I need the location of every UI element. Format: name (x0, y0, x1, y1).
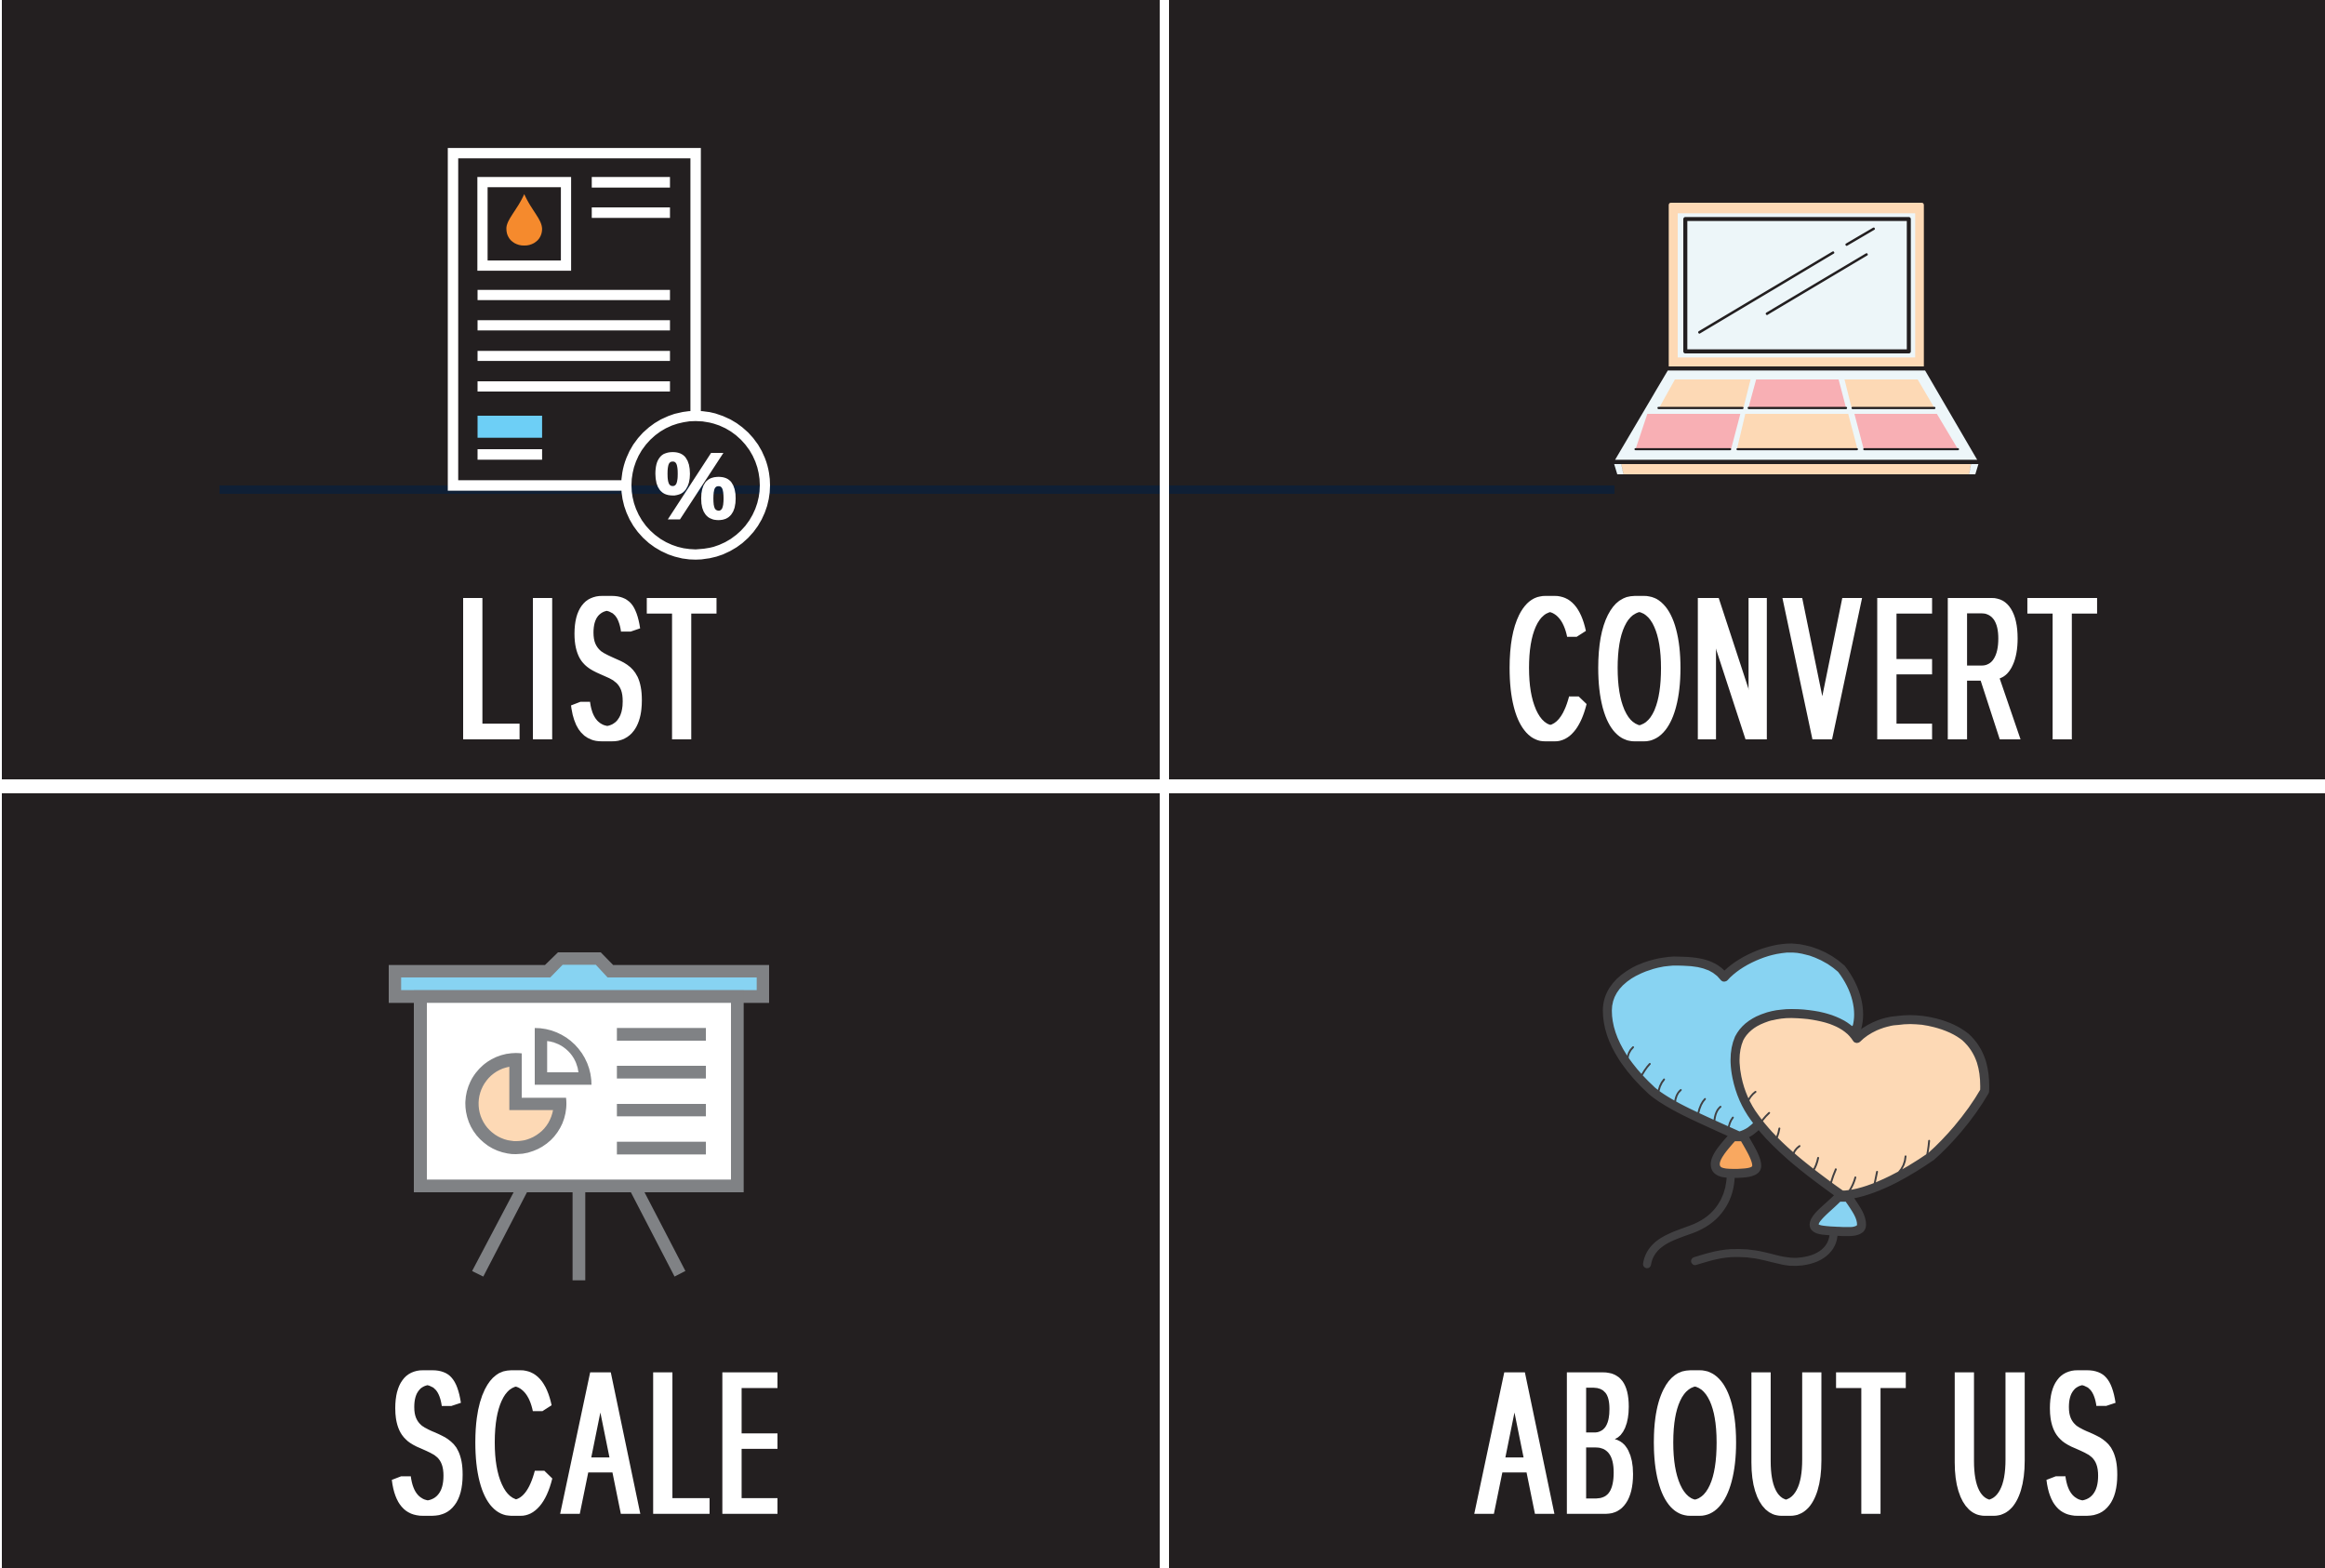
panel: scale background (2, 793, 1160, 1568)
percent badge ring (627, 416, 764, 554)
blue balloon (1607, 948, 1859, 1136)
peach balloon (1735, 1014, 1985, 1195)
icon: presentation board (389, 952, 769, 1281)
icon: heart balloons (1607, 948, 1985, 1264)
panel: list background (2, 0, 1160, 779)
screen frame (1685, 219, 1908, 352)
laptop front edge (1621, 464, 1971, 474)
laptop lid (1668, 203, 1924, 366)
blue highlight bar (478, 416, 542, 438)
pie chart (465, 1028, 591, 1154)
text lines (478, 177, 670, 459)
panel: convert background (1169, 0, 2325, 779)
peach balloon string and knot (1695, 1197, 1862, 1262)
heading: SCALE: SCALE (392, 1329, 790, 1558)
navy horizontal line behind the icons (219, 485, 1614, 494)
blue balloon creases (1628, 1047, 1733, 1130)
panel: about us background (1169, 793, 2325, 1568)
image frame (483, 182, 566, 266)
blue balloon string and knot (1647, 1136, 1757, 1264)
screen roller (389, 952, 769, 1003)
screen bezel (1678, 213, 1915, 357)
heading: LIST: LIST (459, 555, 714, 784)
icon: orange drop (506, 194, 542, 246)
icon: laptop (1614, 203, 1978, 474)
tripod legs (472, 1190, 685, 1281)
board (414, 990, 744, 1192)
heading: ABOUT US: ABOUT US (1479, 1329, 2118, 1558)
laptop base (1615, 370, 1977, 459)
legend lines (617, 1028, 706, 1154)
screen reflections (1699, 229, 1874, 332)
keyboard keys (1636, 379, 1958, 449)
peach balloon creases (1747, 1092, 1929, 1193)
document outline (453, 153, 696, 485)
icon: document with percent badge (453, 153, 764, 554)
percent sign: % (655, 434, 737, 538)
heading: CONVERT: CONVERT (1508, 555, 2095, 784)
